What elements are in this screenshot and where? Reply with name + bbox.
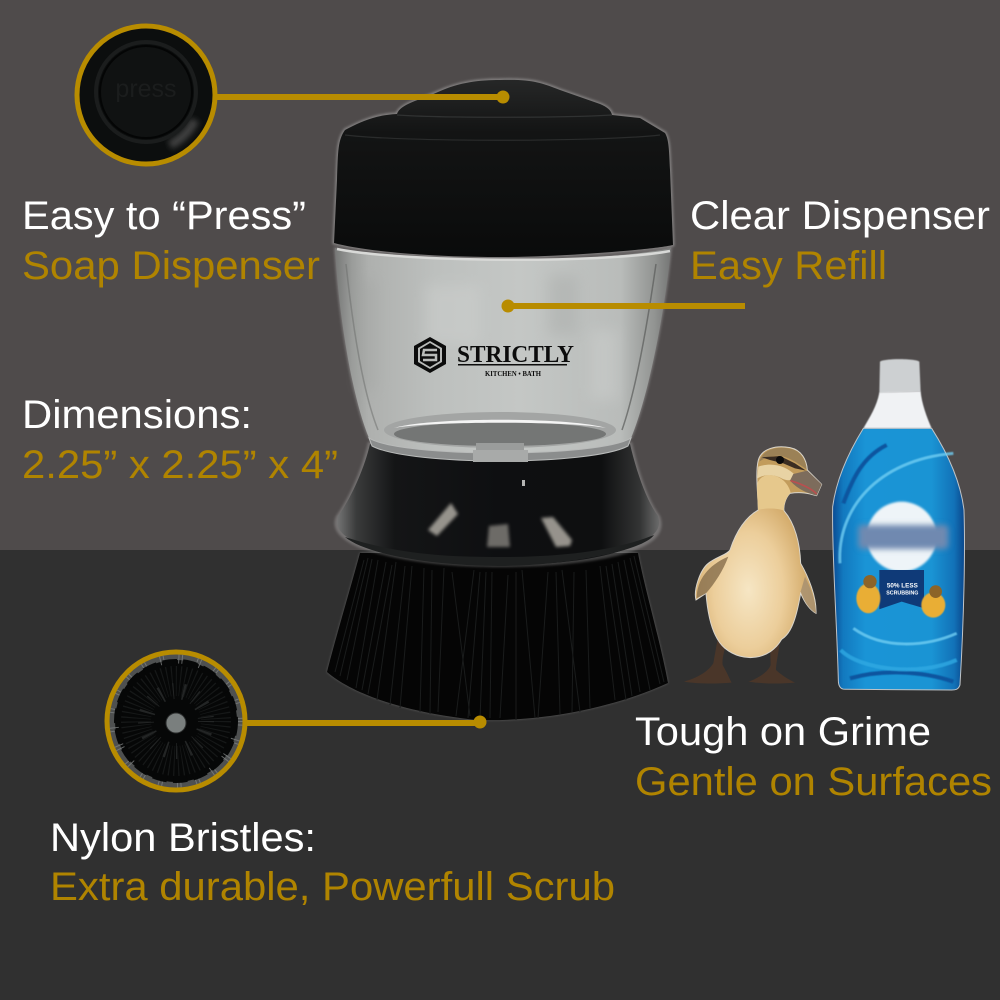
bristles [327, 553, 668, 720]
duck head markings [697, 448, 822, 613]
black dispenser cap with press button [334, 80, 673, 260]
text: tough on grime: Gentle on Surfaces [635, 760, 992, 804]
leader line: clear dispenser [502, 300, 745, 312]
background: lower surface [0, 550, 1000, 1000]
text: dimensions: Dimensions: [22, 393, 252, 437]
text: easy to press [22, 194, 320, 288]
text: tough on grime: Tough on Grime [635, 710, 931, 754]
clear dispenser body [334, 247, 672, 462]
callout: press button icon: press [115, 75, 177, 103]
text: tough on grime [635, 710, 992, 804]
callout: bristles bottom view icon [107, 652, 245, 790]
text: nylon bristles: Nylon Bristles: [50, 816, 316, 860]
leader line: press button [216, 90, 510, 104]
text: nylon bristles [50, 816, 615, 909]
logo: STRICTLY wordmark: KITCHEN • BATH [485, 370, 542, 378]
duckling [684, 447, 822, 684]
text: clear dispenser: Easy Refill [690, 244, 887, 288]
bottle cap [879, 359, 921, 393]
text: clear dispenser [690, 194, 990, 288]
blurred label: SCRUBBING [886, 590, 918, 596]
text: dimensions: 2.25” x 2.25” x 4” [22, 443, 338, 487]
bottle swirl [840, 445, 957, 682]
text: clear dispenser: Clear Dispenser [690, 194, 990, 238]
product: soap dispensing brush [327, 80, 673, 720]
text: dimensions [22, 393, 338, 487]
glossy highlights on collar [428, 503, 572, 547]
text: nylon bristles: Extra durable, Powerfull Scrub [50, 865, 615, 909]
background: upper wall [0, 0, 1000, 550]
bottle body [833, 428, 964, 690]
logo: STRICTLY wordmark: STRICTLY [457, 342, 574, 368]
text: easy to press: Soap Dispenser [22, 244, 320, 288]
logo: hexagon S mark [414, 337, 446, 373]
blurred label [856, 502, 948, 618]
bottle shoulder [863, 391, 932, 428]
dispenser bottom ring [369, 412, 631, 462]
callout: press button icon [77, 26, 215, 164]
duck body [695, 447, 822, 658]
blurred label: 50% LESS [887, 582, 918, 589]
dish soap bottle [833, 359, 964, 690]
leader line: bristles [246, 716, 486, 728]
text: easy to press: Easy to “Press” [22, 194, 306, 238]
duck legs [684, 635, 795, 684]
black base collar [334, 442, 662, 567]
